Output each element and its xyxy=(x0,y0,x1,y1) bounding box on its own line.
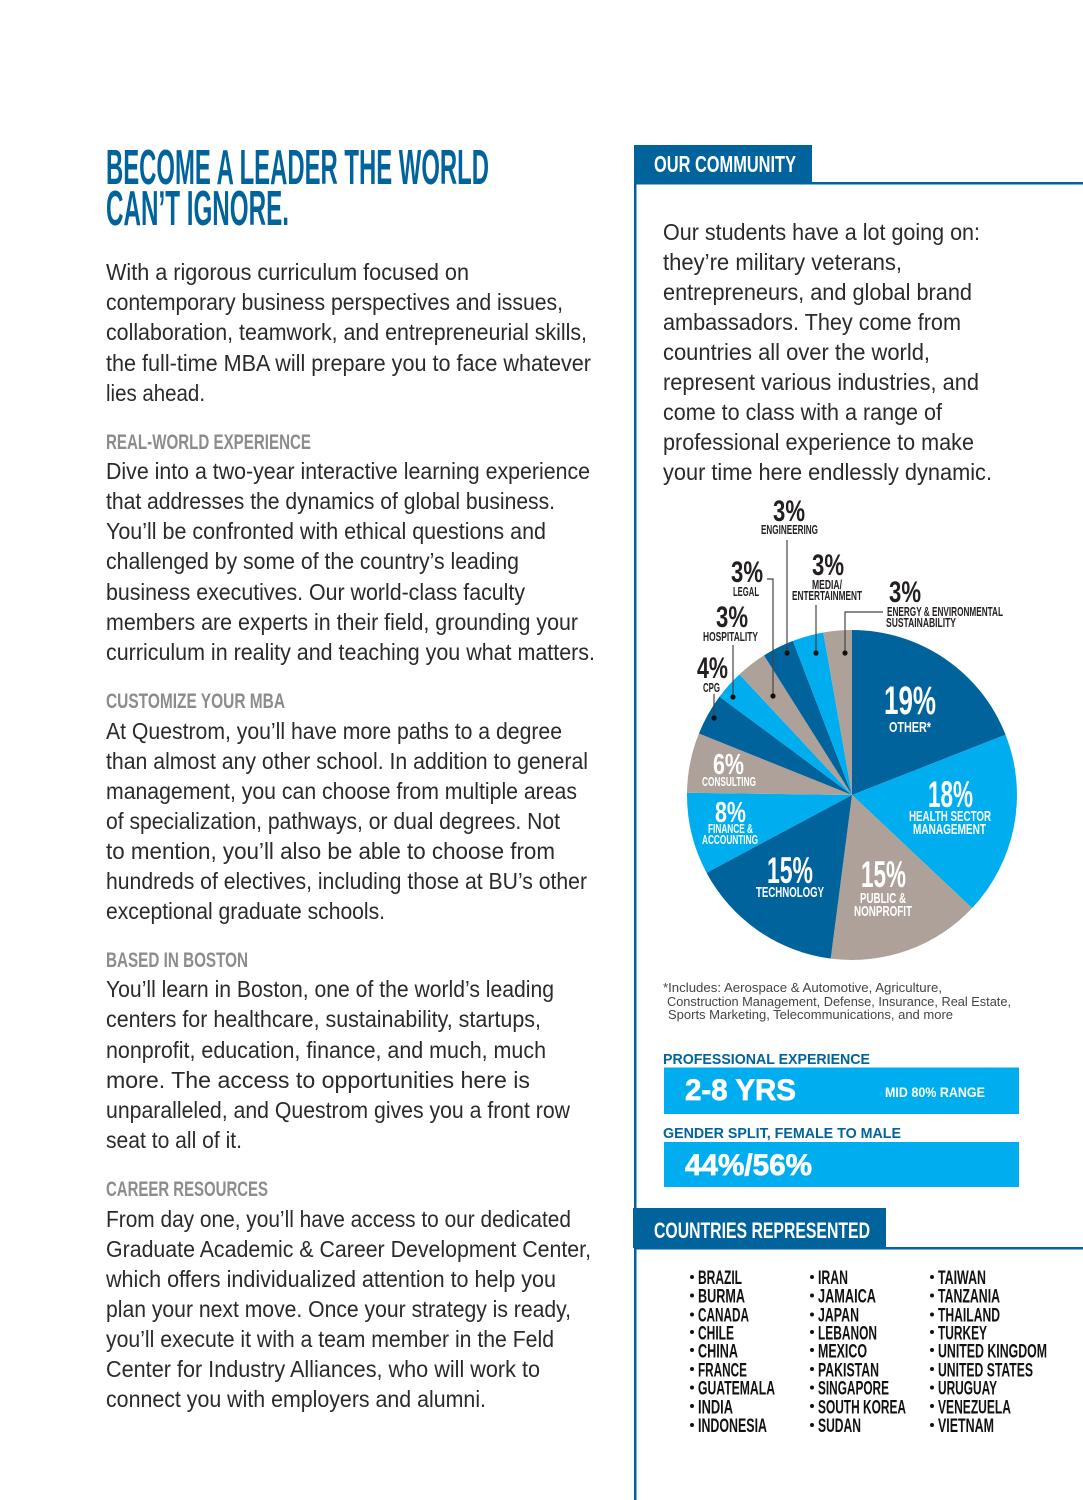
footnote xyxy=(663,980,1011,1022)
label: finance and accounting: FINANCE & xyxy=(708,822,753,836)
text block: based in Boston: You’ll learn in Boston, one of the world’s leading xyxy=(106,976,554,1002)
text block: community intro: represent various industries, and xyxy=(663,369,979,395)
stat: gender split: GENDER SPLIT, FEMALE TO MALE xyxy=(663,1125,901,1142)
text block: community intro: your time here endlessly dynamic. xyxy=(663,459,992,485)
intro paragraph: the full-time MBA will prepare you to face whatever xyxy=(106,350,591,376)
text block: real-world experience: challenged by some of the country’s leading xyxy=(106,548,519,574)
callout: hospitality: 3% xyxy=(716,601,748,634)
intro paragraph xyxy=(106,259,591,406)
stat: professional experience: 2-8 YRS xyxy=(685,1074,796,1107)
text: BECOME A LEADER THE WORLD xyxy=(106,141,489,195)
text block: career resources: From day one, you’ll have access to our dedicated xyxy=(106,1206,571,1232)
text block: career resources xyxy=(105,1206,591,1412)
intro paragraph: collaboration, teamwork, and entrepreneurial skills, xyxy=(106,319,587,345)
footnote: Construction Management, Defense, Insurance, Real Estate, xyxy=(667,994,1011,1009)
country list: column 2: JAPAN xyxy=(818,1306,859,1326)
text block: community intro: ambassadors. They come from xyxy=(663,309,961,335)
label: finance and accounting: ACCOUNTING xyxy=(702,833,758,847)
text block: career resources: which offers individualized attention to help you xyxy=(105,1266,556,1292)
text block: community intro: professional experience to make xyxy=(663,429,974,455)
label: health sector management: 18% xyxy=(928,774,973,815)
callout: engineering xyxy=(761,495,818,656)
panel frame: sidebar rules xyxy=(634,145,1083,1500)
callout: energy and environmental sustainability: 3% xyxy=(889,576,921,609)
callout: media and entertainment: ENTERTAINMENT xyxy=(792,589,862,603)
title xyxy=(106,141,489,236)
pie slice: other 19% xyxy=(852,630,1006,795)
text block: based in Boston: more. The access to opportunities here is xyxy=(106,1067,530,1093)
country list: column 1: BURMA xyxy=(698,1286,745,1308)
pie slice: health sector management 18% xyxy=(852,735,1017,908)
text block: community intro: come to class with a range of xyxy=(663,399,943,425)
text block: career resources: Center for Industry Alliances, who will work to xyxy=(106,1356,540,1382)
text block: career resources: plan your next move. Once your strategy is ready, xyxy=(106,1296,571,1322)
label: finance and accounting xyxy=(702,797,758,847)
text block: customize your MBA: of specialization, pathways, or dual degrees. Not xyxy=(106,808,561,834)
pie chart: industries xyxy=(687,495,1017,960)
country list: column 3: VENEZUELA xyxy=(938,1398,1011,1418)
label: public and nonprofit: 15% xyxy=(861,854,906,895)
text block: career resources: you’ll execute it with a team member in the Feld xyxy=(106,1326,554,1352)
intro paragraph: contemporary business perspectives and issues, xyxy=(106,289,563,315)
label: public and nonprofit xyxy=(854,854,912,920)
callout: media and entertainment xyxy=(792,549,862,656)
callout: legal: LEGAL xyxy=(733,585,759,599)
text block: community intro xyxy=(663,219,992,485)
text block: real-world experience: business executives. Our world-class faculty xyxy=(106,579,525,605)
heading: based in Boston: BASED IN BOSTON xyxy=(106,948,248,972)
country list: column 2: IRAN xyxy=(818,1268,848,1289)
heading: real-world experience: REAL-WORLD EXPERIENCE xyxy=(106,430,311,454)
label: technology xyxy=(756,850,824,901)
label: public and nonprofit: NONPROFIT xyxy=(854,903,912,920)
callout: CPG: CPG xyxy=(703,681,720,695)
pie slice: hospitality 3% xyxy=(720,674,852,795)
text block: real-world experience xyxy=(106,458,595,665)
country list: column 2: MEXICO xyxy=(818,1342,867,1362)
country list: column 2: JAMAICA xyxy=(818,1286,876,1308)
text block: real-world experience: curriculum in reality and teaching you what matters. xyxy=(106,639,595,665)
title: CAN’T IGNORE. xyxy=(106,182,289,236)
country list: column 3: TURKEY xyxy=(938,1324,987,1344)
label: technology: TECHNOLOGY xyxy=(756,884,824,901)
callout: media and entertainment: MEDIA/ xyxy=(812,578,842,592)
pie slice: energy and environmental sustainability 3% xyxy=(823,630,852,795)
label: public and nonprofit: PUBLIC & xyxy=(860,890,906,907)
country list: column 1: CANADA xyxy=(698,1306,749,1326)
text block: community intro: Our students have a lot going on: xyxy=(663,219,980,245)
text block: real-world experience: that addresses the dynamics of global business. xyxy=(106,488,555,514)
text block: real-world experience: You’ll be confronted with ethical questions and xyxy=(106,518,546,544)
stat: professional experience xyxy=(663,1051,1019,1114)
label: health sector management: MANAGEMENT xyxy=(913,821,986,838)
callout: CPG: 4% xyxy=(697,652,728,685)
country list: column 2: SOUTH KOREA xyxy=(818,1398,906,1418)
callout: legal xyxy=(731,556,776,699)
label: consulting xyxy=(702,749,756,789)
text block: community intro: countries all over the world, xyxy=(663,339,930,365)
intro paragraph: lies ahead. xyxy=(106,380,205,406)
label: health sector management xyxy=(909,774,991,838)
label: technology: 15% xyxy=(767,850,813,891)
callout: legal: 3% xyxy=(731,556,763,589)
stat: gender split xyxy=(663,1125,1019,1187)
pie slice: engineering 3% xyxy=(764,641,852,795)
country list: column 3: URUGUAY xyxy=(938,1378,997,1400)
country list: column 1: BRAZIL xyxy=(698,1268,742,1289)
callout: media and entertainment: 3% xyxy=(812,549,844,582)
pie slice: CPG 4% xyxy=(699,697,852,795)
pie slice: legal 3% xyxy=(740,655,852,795)
text block: customize your MBA: management, you can choose from multiple areas xyxy=(106,778,577,804)
text block: career resources: Graduate Academic & Career Development Center, xyxy=(106,1236,591,1262)
country list: column 1: INDONESIA xyxy=(698,1416,767,1437)
tab heading: our community xyxy=(634,145,812,183)
intro paragraph: With a rigorous curriculum focused on xyxy=(106,259,469,285)
tab heading: countries represented: COUNTRIES REPRESENTED xyxy=(654,1218,870,1243)
tab heading: countries represented xyxy=(633,1208,886,1248)
text block: career resources: connect you with employers and alumni. xyxy=(106,1386,486,1412)
callout: hospitality: HOSPITALITY xyxy=(703,630,758,644)
text block: customize your MBA xyxy=(106,718,588,924)
text block: customize your MBA: exceptional graduate schools. xyxy=(106,898,385,924)
country list: column 1 xyxy=(690,1268,775,1437)
text block: community intro: entrepreneurs, and global brand xyxy=(663,279,972,305)
country list: column 1: CHINA xyxy=(698,1342,738,1362)
text block: based in Boston: seat to all of it. xyxy=(106,1127,242,1153)
heading: career resources: CAREER RESOURCES xyxy=(106,1177,268,1201)
callout: energy and environmental sustainability: ENERGY & ENVIRONMENTAL xyxy=(887,605,1003,619)
text block: customize your MBA: hundreds of electives, including those at BU’s other xyxy=(106,868,587,894)
label: other xyxy=(884,679,936,736)
text block: community intro: they’re military veterans, xyxy=(663,249,902,275)
country list: column 3: VIETNAM xyxy=(938,1416,994,1437)
callout: engineering: ENGINEERING xyxy=(761,523,818,537)
country list: column 2: SINGAPORE xyxy=(818,1378,889,1400)
pie slice: consulting 6% xyxy=(687,734,852,795)
stat: professional experience: PROFESSIONAL EXPERIENCE xyxy=(663,1051,870,1068)
stat: professional experience: MID 80% RANGE xyxy=(885,1084,985,1100)
country list: column 3: UNITED STATES xyxy=(938,1360,1033,1382)
footnote: *Includes: Aerospace & Automotive, Agriculture, xyxy=(663,980,942,995)
callout: energy and environmental sustainability xyxy=(842,576,1003,656)
label: other: OTHER* xyxy=(889,719,931,736)
country list: column 1: INDIA xyxy=(698,1398,733,1418)
callout: engineering: 3% xyxy=(773,495,805,528)
callout: CPG xyxy=(697,652,728,721)
tab heading: our community: OUR COMMUNITY xyxy=(654,151,796,177)
country list: column 1: GUATEMALA xyxy=(698,1378,775,1400)
stat: gender split: 44%/56% xyxy=(685,1149,812,1182)
country list: column 2 xyxy=(810,1268,906,1437)
heading: customize your MBA: CUSTOMIZE YOUR MBA xyxy=(106,689,285,713)
pie slice: media and entertainment 3% xyxy=(793,632,852,795)
country list: column 3: TANZANIA xyxy=(938,1286,1000,1308)
label: other: 19% xyxy=(884,679,936,723)
label: consulting: 6% xyxy=(713,749,744,781)
country list: column 2: PAKISTAN xyxy=(818,1360,879,1382)
text block: based in Boston: nonprofit, education, finance, and much, much xyxy=(106,1037,546,1063)
label: consulting: CONSULTING xyxy=(702,775,756,789)
country list: column 3: TAIWAN xyxy=(938,1268,986,1289)
text block: customize your MBA: to mention, you’ll also be able to choose from xyxy=(106,838,555,864)
text block: customize your MBA: than almost any other school. In addition to general xyxy=(106,748,588,774)
label: finance and accounting: 8% xyxy=(715,797,746,829)
text block: based in Boston: unparalleled, and Questrom gives you a front row xyxy=(106,1097,570,1123)
callout: energy and environmental sustainability: SUSTAINABILITY xyxy=(886,616,956,630)
text block: real-world experience: Dive into a two-year interactive learning experience xyxy=(106,458,590,484)
country list: column 3: THAILAND xyxy=(938,1306,1000,1326)
country list: column 1: CHILE xyxy=(698,1324,734,1344)
pie slice: technology 15% xyxy=(706,795,852,959)
footnote: Sports Marketing, Telecommunications, and more xyxy=(668,1007,953,1022)
pie slice: public and nonprofit 15% xyxy=(831,795,972,960)
text block: based in Boston xyxy=(106,976,570,1153)
label: health sector management: HEALTH SECTOR xyxy=(909,808,991,825)
country list: column 1: FRANCE xyxy=(698,1360,747,1382)
text block: real-world experience: members are experts in their field, grounding your xyxy=(106,609,578,635)
callout: hospitality xyxy=(703,601,758,700)
text block: based in Boston: centers for healthcare, sustainability, startups, xyxy=(106,1006,541,1032)
country list: column 3 xyxy=(930,1268,1047,1437)
country list: column 2: LEBANON xyxy=(818,1324,877,1344)
text block: customize your MBA: At Questrom, you’ll have more paths to a degree xyxy=(106,718,562,744)
pie slice: finance and accounting 8% xyxy=(687,793,852,873)
country list: column 2: SUDAN xyxy=(818,1416,861,1437)
